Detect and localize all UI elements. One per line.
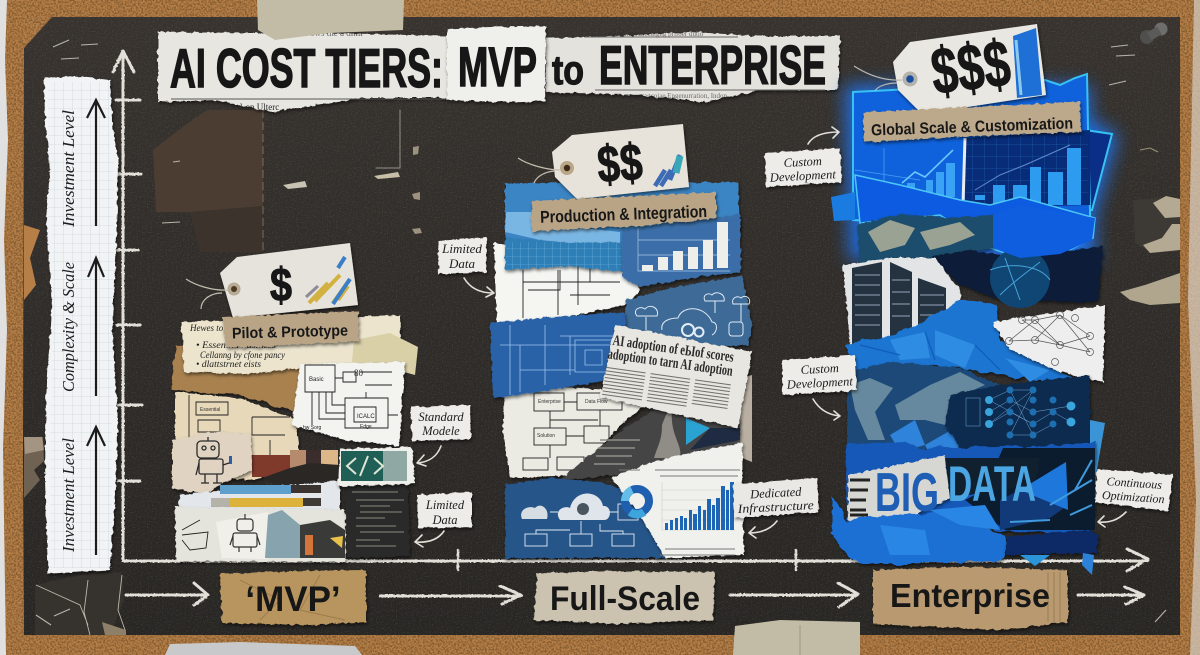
handwritten note: • Essentna business (196, 340, 277, 350)
price tag: three dollars (854, 24, 1046, 114)
dark world map panel (847, 362, 1000, 450)
pushpin (1140, 22, 1168, 44)
note: limited data upper: Data (448, 256, 476, 271)
tier label: enterprise (873, 567, 1068, 630)
kraft paper (172, 340, 305, 412)
title strip right: ENTERPRISE (599, 34, 826, 96)
blue chips (890, 420, 960, 455)
newspaper clipping (600, 325, 752, 428)
title strip left: ows the a dimi (310, 28, 363, 38)
circuit sketch: ICALC (357, 414, 375, 420)
note: custom development upper (765, 148, 842, 187)
title strip right: mooncagcoiae Engenurration, Indon (625, 92, 728, 100)
price tag: two dollars (518, 124, 689, 199)
blue torn fragment right (993, 205, 1095, 258)
title strip left: AI COST TIERS: (170, 37, 443, 99)
flow chart sheet: Data Flow (585, 399, 608, 405)
world map fragment (857, 214, 995, 265)
cloud diagram blue (625, 276, 752, 350)
note: continuous optimization: Optimization (1102, 488, 1165, 506)
left graph paper strip with axis labels (44, 76, 118, 573)
newspaper clipping: AI adoption of eЫof scores (612, 333, 735, 366)
title strip middle: MVP (458, 35, 537, 98)
up arrows (87, 100, 105, 555)
report with bar chart (611, 443, 744, 558)
arrow to standard model note (417, 446, 441, 466)
colour swatches (252, 450, 340, 485)
note: limited data lower (417, 492, 472, 528)
neon glow (845, 85, 1118, 265)
title strip left: l-on Ulterc (240, 102, 279, 112)
flow chart sheet: Solution (537, 433, 555, 439)
x axis chalk arrow (123, 549, 1148, 571)
glowing blue sheets (853, 74, 1112, 230)
arrow from limited data note (464, 278, 494, 297)
heading: production and integration: Production & Integration (540, 202, 707, 227)
arrow to dedicated infrastructure note (749, 521, 777, 538)
robot sketch paper (172, 432, 252, 494)
tan blueprint (175, 392, 300, 480)
y axis chalk arrow (113, 51, 142, 560)
note: limited data lower: Limited (425, 498, 465, 512)
price tag: one dollar: $ (270, 258, 292, 311)
cloud infrastructure panel (505, 478, 665, 558)
circuit sketch (292, 362, 405, 446)
tier label: MVP: ‘MVP’ (245, 580, 341, 619)
stack 2: full-scale collage (490, 124, 752, 558)
newspaper clipping: adoption to tarn AI adoption (607, 346, 734, 380)
stack 3: enterprise collage (831, 24, 1118, 575)
note: dedicated infrastructure: Infrastructure (736, 498, 815, 516)
arrow from custom development upper (808, 127, 839, 144)
note: continuous optimization: Continuous (1106, 474, 1163, 492)
code icon tile (338, 447, 415, 486)
heading: pilot and prototype (222, 311, 359, 348)
arrow to continuous optimization note (1098, 512, 1126, 527)
label: investment level lower: Investment Level (59, 438, 78, 553)
title strip middle (447, 26, 546, 102)
dark globe photo (932, 246, 1103, 308)
note: continuous optimization (1095, 469, 1173, 511)
arrow from custom development lower (813, 399, 840, 420)
note: standard model (411, 405, 471, 441)
note: standard model: Standard (418, 410, 464, 424)
tan blueprint: Essential (200, 407, 220, 413)
note: custom development upper: Development (768, 167, 837, 185)
handwritten note: Hewes to sl (189, 323, 232, 333)
heading: production and integration (531, 192, 716, 231)
masking tape bottom (733, 620, 860, 655)
circuit sketch: hw Sorg (303, 425, 322, 431)
torn bright blue band (855, 175, 1095, 258)
big data banner (845, 442, 1096, 533)
big data banner: BIG (875, 461, 939, 523)
label: complexity and scale: Complexity & Scale (59, 262, 78, 392)
circuit sketch: 80 (354, 368, 364, 378)
circuit sketch: Basic (309, 377, 324, 383)
title strip right: to (552, 47, 584, 93)
note: dedicated infrastructure (733, 478, 819, 518)
note: limited data upper (438, 237, 487, 274)
note: standard model: Modele (421, 424, 460, 438)
bottom crumpled blue (832, 497, 1098, 575)
flow chart sheet: Enterprise (538, 399, 561, 405)
handwritten note (181, 315, 401, 374)
price tag: one dollar (186, 243, 358, 318)
cream backing strip (735, 375, 752, 462)
price tag: three dollars: $$$ (927, 25, 1014, 109)
tape (352, 333, 418, 375)
handwritten note: • dlattstrnet eists (196, 359, 262, 369)
blue top sheet (505, 182, 740, 245)
blue tab (831, 192, 855, 221)
big data banner: DATA (948, 456, 1036, 512)
code editor fragment (345, 484, 410, 558)
note: limited data lower: Data (432, 513, 458, 527)
heading: global scale and customization: Global Scale & Customization (871, 115, 1073, 139)
note: limited data upper: Limited (441, 241, 482, 256)
flow chart sheet (503, 385, 660, 478)
tier label: full-scale (534, 571, 715, 624)
blueprint sheet (490, 312, 628, 398)
tier label: full-scale: Full-Scale (550, 580, 700, 618)
stack 1: MVP collage (172, 243, 418, 562)
title strip right (546, 30, 840, 102)
blue grid sheet (505, 238, 622, 272)
bar chart panel (622, 214, 741, 287)
bottom sketch paper (175, 507, 346, 562)
arrow to limited data note (415, 531, 444, 547)
masking tape top (257, 0, 404, 40)
title: AI Cost Tiers, MVP to Enterprise (158, 26, 840, 112)
note: custom development lower (782, 355, 857, 395)
right blue tab (1090, 420, 1105, 480)
title strip right: cetuen nrtis arecalgng prifoer dutio (605, 30, 704, 38)
price tag: two dollars: $$ (595, 133, 644, 195)
handwritten note: Cellanng by cfone pancy (200, 350, 285, 360)
note: custom development lower: Custom (800, 361, 839, 377)
flow arrows along the bottom (126, 583, 1144, 607)
neural network panel (945, 375, 1090, 452)
note: custom development upper: Custom (783, 154, 822, 170)
circuit sketch: Edge (360, 424, 372, 430)
neural net sketch (992, 305, 1105, 382)
heading: pilot and prototype: Pilot & Prototype (232, 322, 349, 343)
progress bars panel (178, 481, 340, 512)
white technical drawing (494, 243, 640, 330)
title strip left (158, 28, 447, 112)
dark photo fragment (560, 410, 740, 480)
note: custom development lower: Development (785, 374, 854, 392)
note: dedicated infrastructure: Dedicated (749, 485, 803, 501)
server rack photo (843, 258, 962, 345)
crumpled blue paper (845, 300, 1087, 388)
label: investment level upper: Investment Level (59, 110, 78, 228)
tier label: enterprise: Enterprise (890, 577, 1050, 614)
heading: global scale and customization (863, 102, 1081, 142)
tier label: MVP (220, 570, 366, 625)
